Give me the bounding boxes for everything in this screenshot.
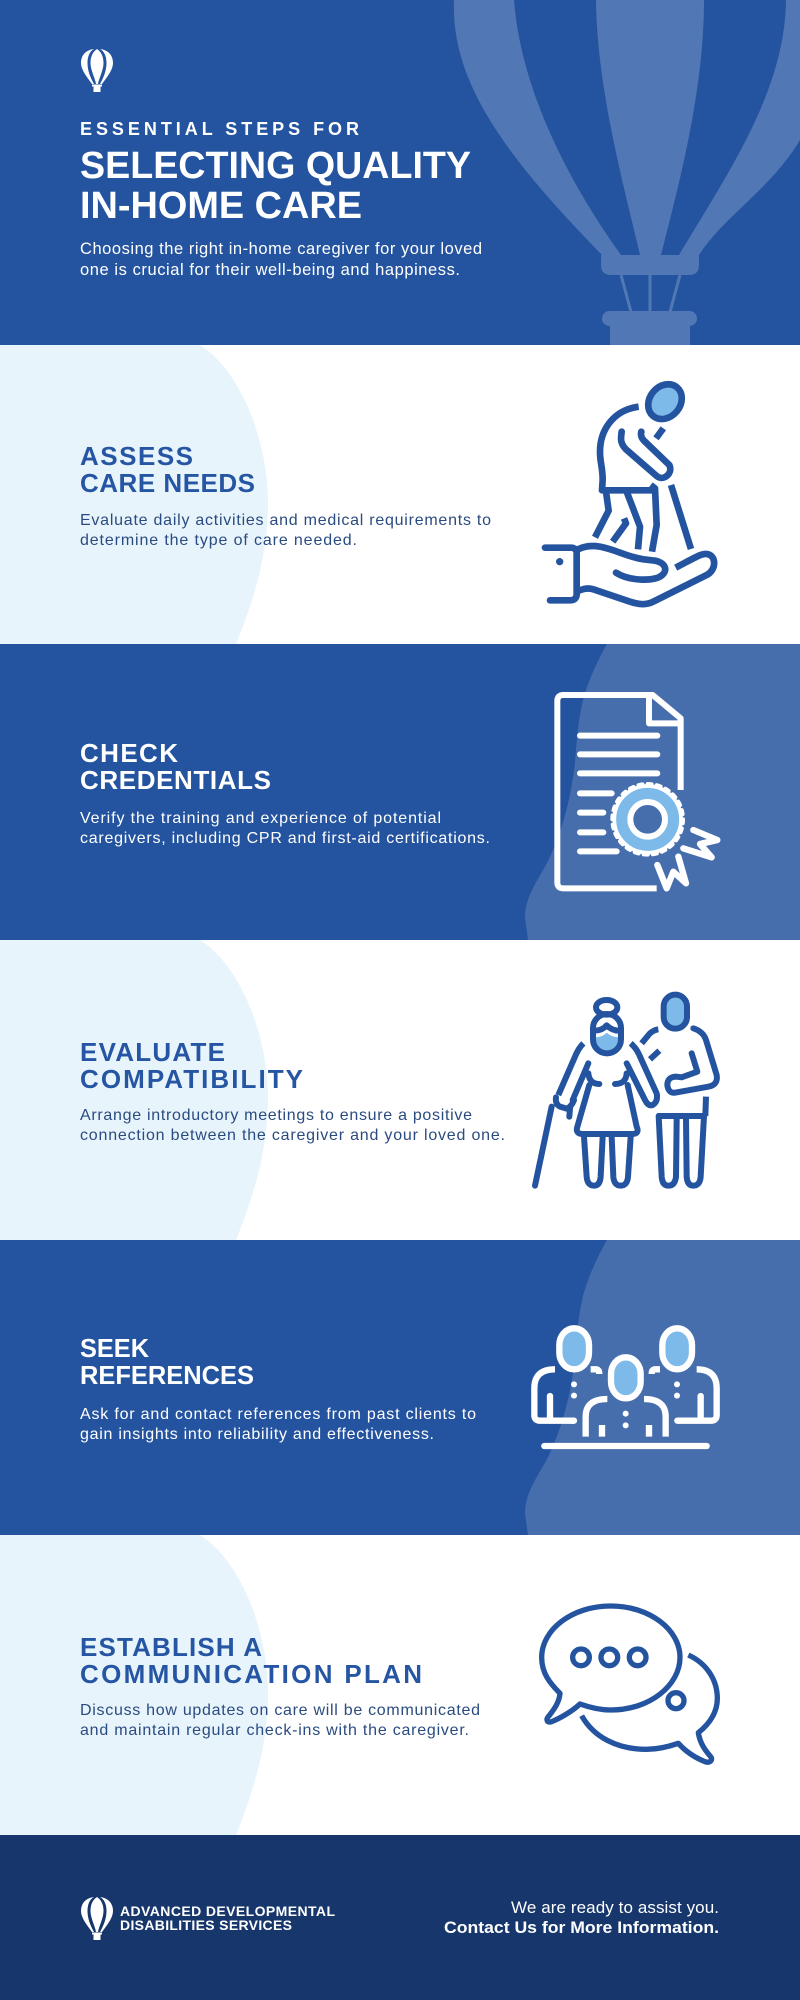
body text: Arrange introductory meetings to ensure a positive: [80, 1107, 472, 1124]
body text: [80, 1406, 476, 1443]
contact call to action: We are ready to assist you.: [511, 1898, 719, 1917]
heading: REFERENCES: [80, 1360, 254, 1390]
intro text: one is crucial for their well-being and happiness.: [80, 261, 460, 279]
heading: [80, 441, 255, 498]
organisation name: [120, 1903, 335, 1933]
icon: elderly person on a hand: [545, 378, 714, 604]
title: [80, 145, 471, 227]
panel: step 3 evaluate compatibility: [0, 940, 800, 1240]
heading: [80, 1333, 254, 1390]
heading: [80, 1632, 422, 1689]
body text: and maintain regular check-ins with the caregiver.: [80, 1722, 469, 1739]
heading: CHECK: [80, 738, 178, 768]
body text: Evaluate daily activities and medical requirements to: [80, 512, 491, 529]
heading: [80, 1037, 303, 1094]
panel: footer: [0, 1835, 800, 2000]
panel: step 2 check credentials: [0, 644, 800, 940]
body text: determine the type of care needed.: [80, 532, 357, 549]
panel: step 5 establish a communication plan: [0, 1535, 800, 1835]
heading: ESTABLISH A: [80, 1632, 262, 1662]
body text: [80, 810, 490, 847]
heading: [80, 738, 271, 795]
body text: Discuss how updates on care will be communicated: [80, 1702, 480, 1719]
body text: [80, 1107, 505, 1144]
panel: step 4 seek references: [0, 1240, 800, 1535]
heading: ASSESS: [80, 441, 193, 471]
contact call to action: Contact Us for More Information.: [444, 1918, 719, 1937]
body text: caregivers, including CPR and first-aid certifications.: [80, 830, 490, 847]
panel: step 1 assess care needs: [0, 345, 800, 644]
body text: Verify the training and experience of potential: [80, 810, 441, 827]
intro text: Choosing the right in-home caregiver for your loved: [80, 240, 482, 258]
heading: CARE NEEDS: [80, 468, 255, 498]
contact call to action: [444, 1898, 719, 1937]
title: SELECTING QUALITY: [80, 145, 471, 187]
heading: CREDENTIALS: [80, 765, 271, 795]
heading: EVALUATE: [80, 1037, 225, 1067]
title: IN-HOME CARE: [80, 185, 362, 227]
heading: COMPATIBILITY: [80, 1064, 303, 1094]
icon: balloon logo: [81, 1897, 113, 1940]
body text: [80, 512, 491, 549]
body text: connection between the caregiver and your loved one.: [80, 1127, 505, 1144]
heading: COMMUNICATION PLAN: [80, 1659, 422, 1689]
body text: Ask for and contact references from past clients to: [80, 1406, 476, 1423]
heading: SEEK: [80, 1333, 149, 1363]
body text: [80, 1702, 480, 1739]
illustration: large hot air balloon: [454, 0, 800, 345]
organisation name: DISABILITIES SERVICES: [120, 1917, 292, 1933]
icon: elderly woman with cane and caregiver: [535, 995, 717, 1186]
body text: gain insights into reliability and effectiveness.: [80, 1426, 434, 1443]
organisation name: ADVANCED DEVELOPMENTAL: [120, 1903, 335, 1919]
eyebrow heading: ESSENTIAL STEPS FOR: [80, 119, 359, 139]
icon: certificate document: [557, 695, 717, 888]
icon: balloon logo: [81, 49, 113, 92]
icon: group of three people: [534, 1328, 717, 1446]
intro text: [80, 240, 482, 279]
icon: speech bubbles: [542, 1606, 717, 1762]
panel: header: [0, 0, 800, 345]
